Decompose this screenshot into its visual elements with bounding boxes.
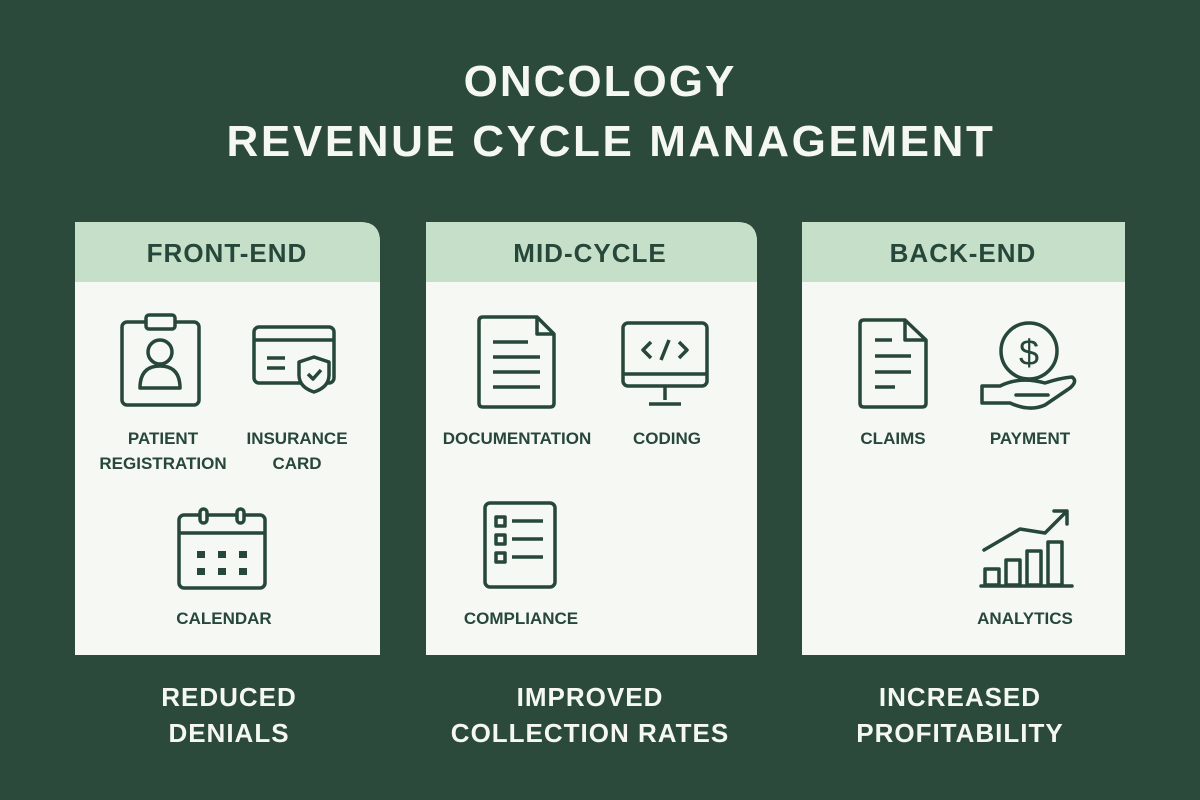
icon: analytics chart	[981, 511, 1072, 586]
outcome: improved collection rates: COLLECTION RATES	[451, 718, 729, 748]
label: patient registration: REGISTRATION	[99, 454, 227, 473]
label: insurance card: CARD	[272, 454, 322, 473]
outcome: improved collection rates	[451, 682, 729, 748]
label: coding: CODING	[633, 429, 701, 448]
heading: mid-cycle: MID-CYCLE	[513, 238, 667, 268]
heading: front-end: FRONT-END	[147, 238, 307, 268]
label: calendar: CALENDAR	[176, 609, 272, 628]
icon: documentation	[479, 317, 554, 407]
outcome: reduced denials: DENIALS	[168, 718, 290, 748]
label: insurance card	[246, 429, 348, 473]
icon: patient registration badge	[122, 315, 199, 405]
panel: back-end	[802, 222, 1125, 655]
title: ONCOLOGY	[464, 57, 736, 106]
panel: mid-cycle	[426, 222, 757, 655]
icon: compliance checklist	[485, 503, 555, 587]
label: compliance: COMPLIANCE	[464, 609, 578, 628]
icon: insurance card	[254, 327, 334, 392]
icon: calendar	[179, 509, 265, 588]
title	[227, 57, 995, 166]
outcome: increased profitability: PROFITABILITY	[856, 718, 1064, 748]
label: patient registration	[99, 429, 227, 473]
icon: payment hand and coin: $	[1019, 332, 1039, 373]
outcome: improved collection rates: IMPROVED	[517, 682, 663, 712]
label: payment: PAYMENT	[990, 429, 1071, 448]
outcome: increased profitability	[856, 682, 1064, 748]
label: analytics: ANALYTICS	[977, 609, 1073, 628]
label: insurance card: INSURANCE	[246, 429, 348, 448]
icon: payment hand and coin	[982, 323, 1075, 408]
outcome: reduced denials	[161, 682, 297, 748]
label: patient registration: PATIENT	[128, 429, 199, 448]
icon: coding monitor	[623, 323, 707, 404]
panel: front-end	[75, 222, 380, 655]
label: claims: CLAIMS	[860, 429, 926, 448]
title: REVENUE CYCLE MANAGEMENT	[227, 117, 995, 166]
outcome: increased profitability: INCREASED	[879, 682, 1041, 712]
heading: back-end: BACK-END	[890, 238, 1036, 268]
outcome: reduced denials: REDUCED	[161, 682, 297, 712]
label: documentation: DOCUMENTATION	[443, 429, 591, 448]
icon: claims document	[860, 320, 926, 407]
